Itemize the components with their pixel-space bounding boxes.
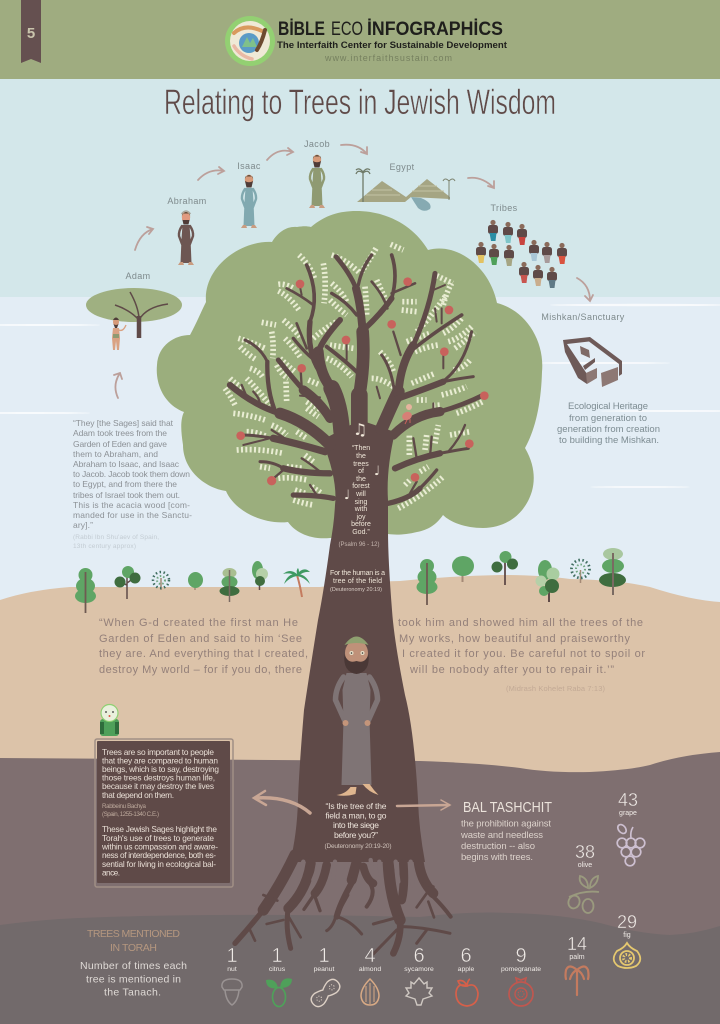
icon: pomegranate [509,978,533,1006]
count: citrus [266,945,292,1006]
man standing in trunk [336,636,378,796]
count: nut: 1 [226,945,238,967]
tree branches [230,255,483,503]
tree crown [157,211,542,538]
psalm quote on trunk: (Psalm 96 - 12) [338,542,380,548]
bal tashchit body: begins with trees. [461,852,533,863]
bird on branch [401,404,413,424]
panel text: jewish sages: ness of interdependence, both es- [102,850,216,860]
siege quote on trunk: before you?” [334,830,378,840]
icon: olive [567,876,599,913]
bookmark with page number [21,0,41,63]
count: grape: grape [619,810,637,817]
organisation name: The Interfaith Center for Sustainable Development [277,40,507,50]
figure: Abraham [178,211,194,265]
count: palm: 14 [567,934,587,954]
icon: peanut [309,977,342,1009]
tree 8 [416,559,438,605]
psalm quote on trunk: with [354,506,367,513]
count: apple: 6 [460,945,472,967]
row of small trees right [416,548,626,605]
background: dark lower soil [0,912,720,1024]
info panel: sages [95,739,233,887]
left sages quote: to Jacob. Jacob took them down [73,469,190,479]
count: peanut [309,945,342,1009]
left sages quote: (Rabbi Ibn Shu'aev of Spain, [73,534,159,541]
psalm quote on trunk: God.” [352,529,370,536]
organisation name [277,19,507,50]
panel citation: Rabbeinu Bachya [102,803,147,810]
midrash quote right column: will be nobody after you to repair it.’” [409,664,614,676]
icon: fig [614,943,640,968]
arrow to bal tashchit [397,800,450,810]
count: almond: 4 [364,945,376,967]
ecological heritage text: generation from creation [557,424,660,435]
background: sand ground [0,575,720,800]
panel citation: (Spain, 1255-1340 C.E.) [102,811,159,818]
psalm quote on trunk: will [355,491,366,498]
lineage labels: Egypt [389,162,415,172]
tree roots [235,855,451,954]
psalm quote on trunk: “Then [352,445,370,452]
count: apple: apple [458,966,475,973]
count: almond [359,945,381,1005]
deuteronomy quote on trunk: tree of the field [333,578,382,585]
tree 12 [572,560,590,583]
psalm quote on trunk: joy [356,514,366,521]
trees mentioned note [80,960,187,998]
palm tree [283,568,310,597]
Mishkan sanctuary [563,337,622,387]
left sages quote: Adam took trees from the [73,428,167,438]
left sages quote: ary].” [73,520,93,530]
count: fig: 29 [617,912,637,932]
ecological heritage text [557,401,660,446]
trees mentioned heading: TREES MENTIONED [87,928,180,940]
panel text: jewish sages: ance. [102,868,120,878]
count: grape: 43 [618,790,638,810]
psalm quote on trunk: trees [353,461,369,468]
midrash citation: (Midrash Kohelet Raba 7:13) [506,684,606,693]
background: grey soil [0,752,720,1024]
bal tashchit body: the prohibition against [461,818,551,830]
organisation name: BİBLE [278,19,325,40]
panel text: jewish sages [101,824,218,878]
left sages quote: Abraham to Isaac, and Isaac [73,459,180,469]
icon: apple [456,979,478,1006]
panel text: jewish sages: Torah's use of trees to generate [102,833,214,843]
lineage arrows [114,145,593,398]
Egypt pyramids [356,169,455,211]
tree 1 [75,568,96,613]
tree 3 [153,572,169,590]
siege quote on trunk: “Is the tree of the [326,801,387,811]
figure: Adam [112,318,126,350]
left sages quote: to Egypt, and from there the [73,479,177,489]
figure: Isaac [241,175,257,228]
leaves [225,244,483,508]
count: nut [222,945,242,1005]
lineage labels: Mishkan/Sanctuary [541,312,625,322]
siege quote on trunk: into the siege [333,820,379,830]
tree 4 [188,572,203,590]
trees mentioned heading [87,928,180,954]
siege quote on trunk [324,801,392,850]
icon: nut [222,979,242,1005]
count: olive [567,842,599,913]
count: almond: almond [359,966,381,973]
background: lower sky [0,297,720,617]
panel text: jewish sages: These Jewish Sages highlight the [102,824,217,834]
siege quote on trunk: field a man, to go [326,810,387,820]
logo [225,16,275,66]
panel text: trees and people: because it may destroy the lives [102,781,214,791]
music notes: ♩ [374,464,380,479]
panel text: trees and people: those trees destroys human life, [102,772,215,782]
deuteronomy quote on trunk: For the human is a [330,570,385,577]
trees mentioned heading: IN TORAH [110,942,157,954]
count: sycamore: sycamore [404,966,434,973]
panel text: trees and people: that they are compared to human [102,756,218,766]
count: pomegranate [501,945,541,1006]
tree 10 [492,551,518,585]
organisation name: ECO [331,19,363,40]
panel text: trees and people: Trees are so important to people [102,747,214,757]
count: fig: fig [623,932,631,939]
website: www.interfaithsustain.com [324,53,452,63]
lineage labels [125,139,625,322]
midrash quote left column: they are. And everything that I created, [99,648,308,660]
Adam's tree [86,288,182,338]
bal tashchit body: waste and needless [460,830,543,841]
icon: citrus [266,978,292,1006]
count: palm [566,934,588,995]
bookmark with page number: 5 [27,25,35,42]
bal tashchit heading: BAL TASHCHIT [463,799,552,816]
trees mentioned note: the Tanach. [104,986,161,998]
icon: almond [361,979,379,1005]
tree 13 [599,548,626,595]
panel text: trees and people: beings, which is to say, destroying [102,764,219,774]
psalm quote on trunk: of [358,468,364,475]
icon: grape [616,823,645,866]
count: citrus: citrus [269,966,286,973]
background: upper sky [0,79,720,299]
left sages quote: Garden of Eden and gave [73,439,167,449]
count: peanut: 1 [318,945,330,967]
lineage labels: Jacob [304,139,330,149]
count: sycamore [404,945,434,1005]
midrash quote right column [398,617,645,676]
music notes [344,420,380,503]
header band [0,0,720,79]
left sages quote: This is the acacia wood [com- [73,500,190,510]
lineage labels: Isaac [237,161,261,171]
bal tashchit body [460,818,551,863]
panel text: jewish sages: sential for living in ecological bal- [102,859,216,869]
red fruits [236,277,489,485]
psalm quote on trunk: the [356,453,366,460]
left sages quote: “They [the Sages] said that [73,418,174,428]
trees mentioned note: tree is mentioned in [86,974,181,986]
count: pomegranate: 9 [515,945,527,967]
midrash quote left column: “When G-d created the first man He [99,617,298,629]
tree trunk [290,420,425,862]
tree 6 [252,561,268,590]
count: sycamore: 6 [413,945,425,967]
ecological heritage text: Ecological Heritage [568,401,648,412]
figure: Jacob [309,155,325,208]
midrash quote left column: destroy My world – for if you do, there [99,664,302,676]
midrash quote right column: took him and showed him all the trees of the [398,617,643,629]
owl mascot [100,704,119,736]
icon: sycamore leaf [406,978,432,1005]
trees mentioned note: Number of times each [80,960,187,972]
row of small trees left [75,561,310,613]
count: fig [614,912,640,968]
psalm quote on trunk: the [356,476,366,483]
count: grape [616,790,645,866]
lineage labels: Tribes [490,203,518,213]
panel text: jewish sages: within us compassion and aware- [101,842,218,852]
lineage labels: Adam [125,271,151,281]
psalm quote on trunk: forest [352,483,370,490]
music notes: ♩ [344,488,350,503]
panel citation [102,803,159,818]
left sages quote: 13th century approx) [73,543,136,550]
tree 9 [452,556,474,582]
ecological heritage text: from generation to [569,413,647,424]
deuteronomy quote on trunk [330,570,385,593]
music notes: ♫ [353,420,367,439]
twelve tribes [476,220,567,288]
panel text: trees and people: that depend on them. [102,790,174,800]
tree 5 [220,568,240,602]
count: palm: palm [569,954,585,961]
lineage labels: Abraham [167,196,207,206]
left sages quote [73,418,192,550]
arrow to panel [254,791,310,813]
count: nut: nut [227,966,237,973]
icon: palm [566,966,588,995]
ecological heritage text: to building the Mishkan. [559,435,659,446]
count: olive: 38 [575,842,595,862]
count: pomegranate: pomegranate [501,966,541,973]
psalm quote on trunk: before [351,521,371,528]
title: Relating to Trees in Jewish Wisdom [164,83,556,122]
count: citrus: 1 [271,945,283,967]
left sages quote: them to Abraham, and [73,449,158,459]
tree 11 [536,560,560,602]
midrash quote left column: Garden of Eden and said to him ‘See [99,633,302,645]
count: peanut: peanut [314,966,335,973]
psalm quote on trunk [338,445,380,548]
midrash quote right column: My works, how beautiful and praiseworthy [399,633,630,645]
organisation name: İNFOGRAPHİCS [367,19,503,40]
left sages quote: tribes of Israel took them out. [73,490,180,500]
left sages quote: manded for use in the Sanctu- [73,510,192,520]
panel text: trees and people [102,747,219,800]
midrash quote right column: I created it for you. Be careful not to spoil or [402,648,645,660]
bal tashchit body: destruction -- also [461,841,535,852]
tree 2 [114,566,140,599]
psalm quote on trunk: sing [355,499,368,506]
count: olive: olive [578,862,592,869]
count: apple [456,945,478,1006]
deuteronomy quote on trunk: (Deuteronomy 20:19) [330,587,382,593]
siege quote on trunk: (Deuteronomy 20:19-20) [324,843,392,850]
midrash quote left column [99,617,308,676]
